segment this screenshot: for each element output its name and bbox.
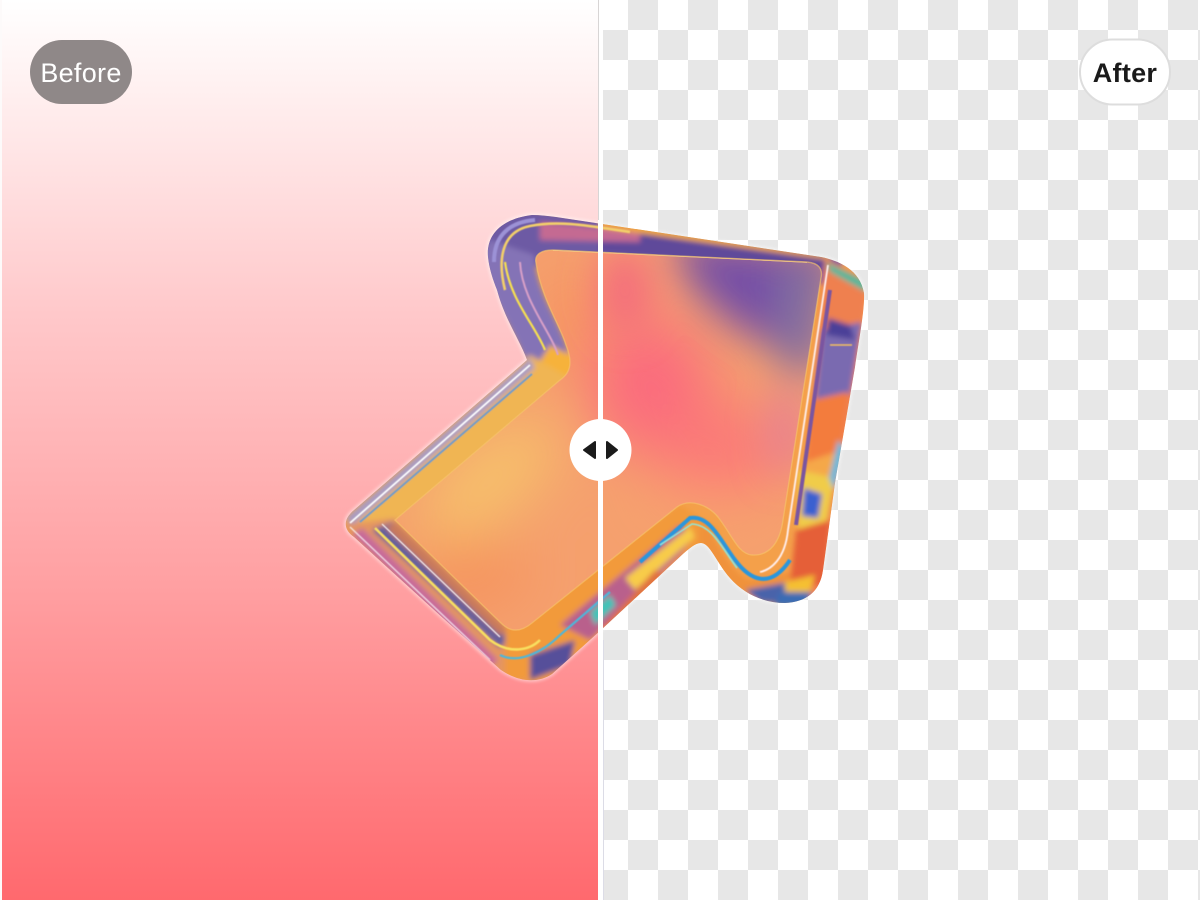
bottom rim [505,505,720,680]
divider line [598,0,604,900]
top rim [488,215,844,288]
arrow: glass rim [340,205,868,690]
left notch rim [488,240,569,364]
label: Before: Before [40,58,122,88]
icon: left triangle [584,442,595,458]
label: Before [30,40,132,104]
upper-left rim [345,355,570,525]
arrow: face edge highlight [395,250,821,630]
bright rim lines [350,220,852,660]
label: After: After [1093,58,1157,88]
icon: iridescent glass arrow [340,205,868,690]
right rim [806,258,864,598]
label: After [1080,40,1170,104]
arrow: front face gradient [396,250,822,630]
panel: after transparent checkerboard [603,0,1200,900]
lower-left rim [340,518,530,690]
icon: right triangle [607,442,617,458]
arrow: soft edge [346,215,864,680]
panel: before background [0,0,599,900]
icon: slider handle [570,419,632,481]
